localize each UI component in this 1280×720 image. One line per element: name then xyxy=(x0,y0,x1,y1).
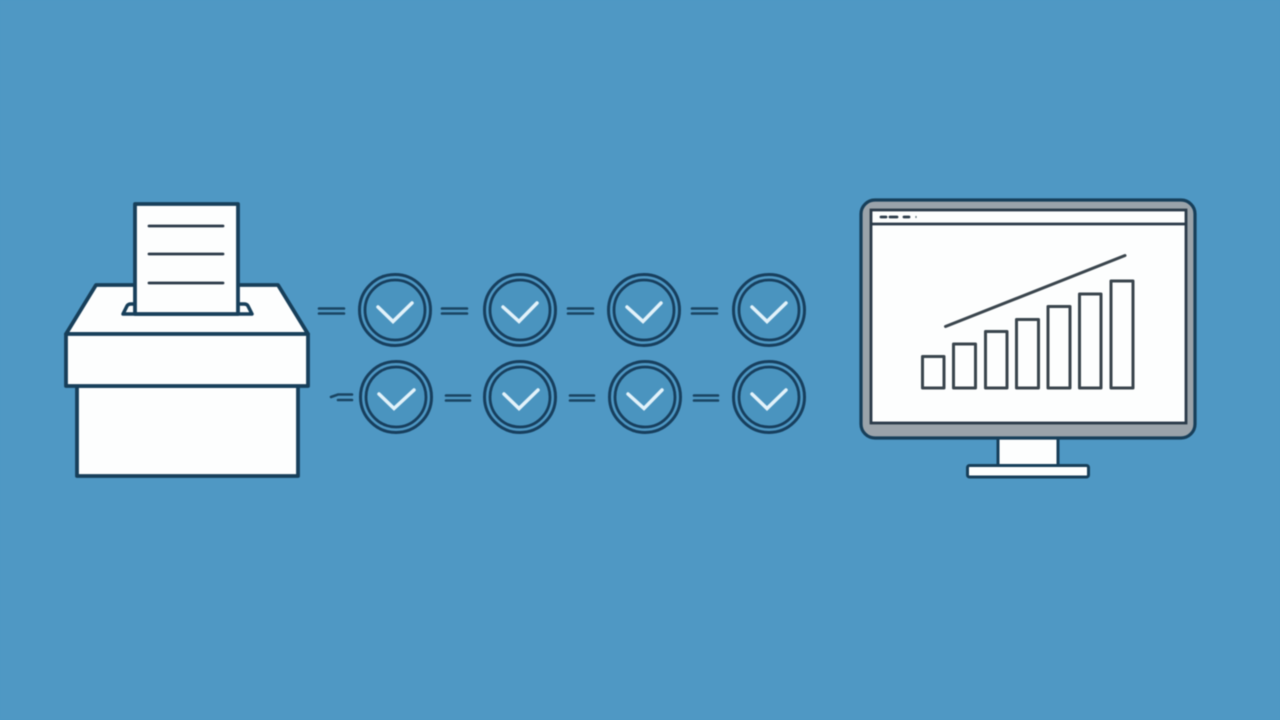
ballot box body xyxy=(77,386,298,476)
ballot box lid top xyxy=(66,285,308,334)
icon: computer monitor with chart xyxy=(861,200,1195,477)
monitor bezel xyxy=(861,200,1195,438)
ballot paper xyxy=(135,204,238,314)
trend line xyxy=(946,256,1125,326)
bar chart xyxy=(922,281,1133,388)
connectors: dashes between checks xyxy=(319,308,718,400)
monitor screen xyxy=(871,210,1186,423)
monitor stand base xyxy=(968,466,1088,477)
check badge 4 xyxy=(734,274,804,346)
check badge 1 xyxy=(360,274,430,346)
check badge 6 xyxy=(484,362,556,432)
check badge 5 xyxy=(360,362,432,432)
check circles row 1 xyxy=(360,274,804,346)
icon: ballot box with paper xyxy=(66,204,308,476)
check circles row 2 xyxy=(360,362,804,432)
browser title bar xyxy=(871,216,1186,224)
check badge 3 xyxy=(608,274,680,346)
monitor stand neck xyxy=(998,436,1058,466)
connector row 1 xyxy=(319,308,717,314)
arrow: return to ballot box xyxy=(331,394,352,400)
ballot slot xyxy=(123,304,252,314)
check badge 2 xyxy=(484,274,556,346)
connector row 2 xyxy=(446,396,718,400)
ballot box lid front xyxy=(66,334,308,386)
check badge 8 xyxy=(734,362,804,432)
check badge 7 xyxy=(610,362,680,432)
